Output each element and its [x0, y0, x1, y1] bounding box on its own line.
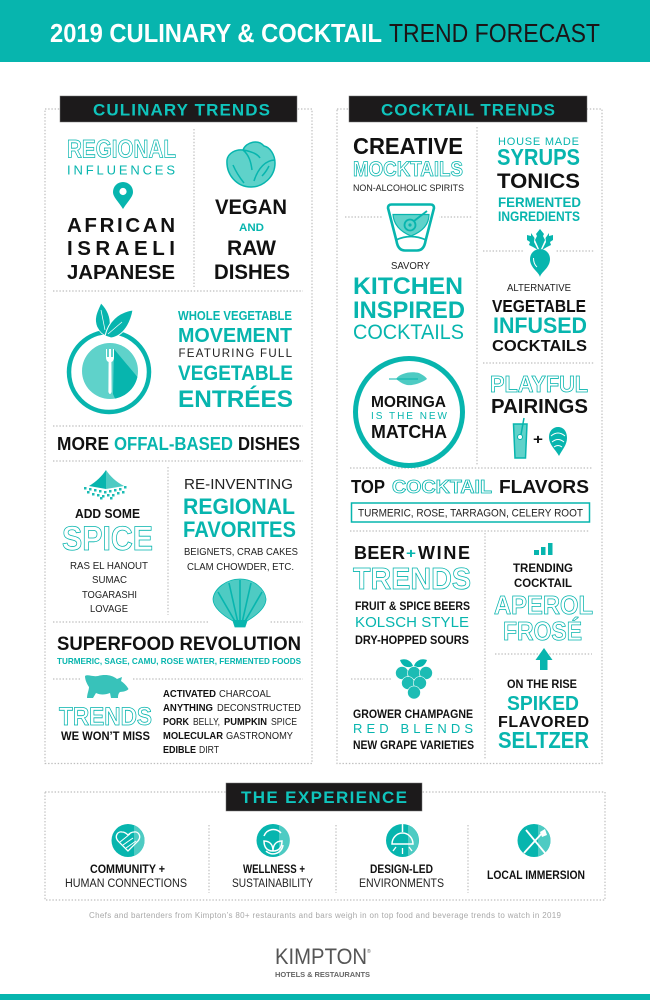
more offal-based dishes: OFFAL-BASED [114, 434, 233, 454]
playful pairings [490, 371, 588, 458]
icon: spice pile [84, 470, 126, 500]
creative mocktails: MOCKTAILS [353, 158, 463, 181]
local immersion: LOCAL IMMERSION [487, 870, 585, 882]
logo: kimpton: ® [367, 948, 371, 955]
heading: the experience: THE EXPERIENCE [241, 788, 407, 807]
trending cocktail aperol frose: TRENDING [513, 561, 573, 575]
add some spice: SPICE [62, 520, 153, 558]
whole vegetable movement: WHOLE VEGETABLE [178, 309, 292, 323]
community and human connections: HUMAN CONNECTIONS [65, 878, 187, 890]
list of trends: BELLY, [193, 716, 220, 728]
kitchen inspired cocktails: SAVORY [391, 261, 430, 272]
icon: bars [534, 543, 552, 555]
playful pairings: PLAYFUL [490, 371, 588, 397]
icon: leaf [389, 372, 427, 385]
kitchen inspired cocktails: INSPIRED [353, 297, 465, 324]
icon: leaves and arrows [256, 824, 290, 857]
add some spice: RAS EL HANOUT [70, 560, 149, 572]
top cocktail flavors: TURMERIC, ROSE, TARRAGON, CELERY ROOT [358, 508, 583, 520]
house made syrups tonics: TONICS [497, 170, 580, 193]
more offal-based dishes [57, 434, 300, 454]
plus sign: + [533, 431, 543, 447]
beer and wine trends: GROWER CHAMPAGNE [353, 707, 473, 721]
top cocktail flavors: FLAVORS [499, 477, 589, 497]
community and human connections [65, 824, 187, 890]
moringa badge [356, 358, 462, 466]
add some spice: ADD SOME [75, 506, 140, 521]
heading: culinary trends [60, 96, 297, 122]
beer and wine trends: RED BLENDS [353, 721, 473, 736]
regional influences: JAPANESE [67, 261, 175, 284]
house made syrups tonics: SYRUPS [497, 144, 580, 170]
vegan and raw dishes: RAW [227, 237, 276, 260]
top cocktail flavors: COCKTAIL [392, 477, 492, 497]
logo: kimpton: HOTELS & RESTAURANTS [275, 970, 370, 979]
icon: cabbage [227, 142, 275, 187]
superfood revolution: TURMERIC, SAGE, CAMU, ROSE WATER, FERMENTED FOODS [57, 656, 301, 666]
regional influences [67, 136, 176, 284]
playful pairings: PAIRINGS [491, 395, 588, 418]
whole vegetable movement: MOVEMENT [178, 325, 292, 347]
icon: heart handshake [112, 824, 145, 857]
trending cocktail aperol frose: COCKTAIL [514, 576, 572, 590]
beer and wine trends: WINE [418, 543, 470, 563]
creative mocktails [353, 133, 464, 194]
regional influences: AFRICAN [67, 214, 175, 237]
vegan and raw dishes: VEGAN [215, 196, 287, 219]
logo: kimpton [275, 944, 371, 979]
regional influences: INFLUENCES [67, 162, 175, 178]
spiked flavored seltzer: SELTZER [498, 727, 589, 753]
icon: pig [80, 675, 132, 698]
house made syrups tonics: INGREDIENTS [498, 208, 580, 224]
wellness and sustainability: SUSTAINABILITY [232, 878, 313, 890]
moringa badge: MORINGA [371, 394, 446, 411]
heading: the experience [226, 783, 422, 811]
list of trends: DIRT [199, 744, 219, 756]
icon: tall drink [514, 418, 527, 458]
whole vegetable movement [69, 303, 293, 413]
icon: oyster [549, 427, 567, 456]
title banner [0, 0, 650, 62]
superfood revolution: SUPERFOOD REVOLUTION [57, 634, 301, 655]
list of trends: DECONSTRUCTED [217, 702, 301, 714]
list of trends: ACTIVATED [163, 688, 216, 700]
spiked flavored seltzer [498, 677, 589, 753]
panel: cocktail trends [337, 96, 602, 764]
list of trends: GASTRONOMY [226, 730, 293, 742]
kitchen inspired cocktails: COCKTAILS [353, 321, 464, 344]
house made syrups tonics: FERMENTED [498, 194, 581, 210]
add some spice: SUMAC [92, 574, 127, 586]
title banner: 2019 CULINARY & COCKTAIL [50, 20, 382, 48]
design-led environments: DESIGN-LED [370, 864, 433, 876]
list of trends [163, 688, 301, 756]
icon: cocktail glass [383, 203, 439, 253]
house made syrups tonics: HOUSE MADE [498, 136, 579, 148]
top cocktail flavors: TOP [351, 477, 385, 497]
creative mocktails: CREATIVE [353, 133, 463, 159]
alternative vegetable infused cocktails [492, 283, 587, 355]
list of trends: ANYTHING [163, 702, 213, 714]
icon: shell [208, 579, 270, 627]
list of trends: EDIBLE [163, 744, 196, 756]
re-inventing regional favorites: FAVORITES [183, 517, 296, 542]
re-inventing regional favorites: CLAM CHOWDER, ETC. [187, 561, 294, 573]
re-inventing regional favorites: BEIGNETS, CRAB CAKES [184, 546, 298, 558]
whole vegetable movement: FEATURING FULL [178, 348, 293, 360]
alternative vegetable infused cocktails: INFUSED [493, 313, 587, 338]
panel: culinary trends [45, 96, 312, 764]
icon: pendant lamp [386, 822, 419, 857]
beer and wine trends [353, 543, 474, 752]
more offal-based dishes: MORE [57, 434, 109, 454]
re-inventing regional favorites [183, 476, 298, 627]
trending cocktail aperol frose [494, 543, 593, 646]
heading: cocktail trends [349, 96, 587, 122]
alternative vegetable infused cocktails: ALTERNATIVE [507, 283, 571, 294]
icon: crossed knife and fork [518, 824, 550, 857]
design-led environments [359, 822, 444, 890]
top cocktail flavors [351, 477, 590, 522]
trends we won't miss: TRENDS [59, 703, 152, 731]
regional influences: REGIONAL [67, 136, 176, 164]
icon: up arrow [536, 648, 552, 670]
wellness and sustainability [232, 824, 313, 890]
add some spice: LOVAGE [90, 603, 128, 615]
moringa badge: IS THE NEW [371, 411, 448, 422]
local immersion [487, 824, 585, 882]
vegan and raw dishes [214, 142, 290, 284]
beer and wine trends: KOLSCH STYLE [355, 614, 469, 631]
beer and wine trends: + [406, 545, 416, 561]
icon: map pin [113, 182, 133, 209]
spiked flavored seltzer: ON THE RISE [507, 677, 577, 691]
beer and wine trends: DRY-HOPPED SOURS [355, 633, 469, 647]
moringa badge: MATCHA [371, 422, 447, 442]
wellness and sustainability: WELLNESS + [243, 864, 305, 876]
logo: kimpton: KIMPTON [275, 944, 367, 969]
heading: cocktail trends: COCKTAIL TRENDS [381, 100, 555, 120]
whole vegetable movement: ENTRÉES [178, 385, 293, 413]
spiked flavored seltzer: FLAVORED [498, 714, 589, 731]
vegan and raw dishes: AND [239, 222, 264, 234]
whole vegetable movement: VEGETABLE [178, 362, 293, 385]
footer bar [0, 994, 650, 1000]
more offal-based dishes: DISHES [238, 434, 300, 454]
beer and wine trends: NEW GRAPE VARIETIES [353, 738, 474, 752]
panel: the experience [45, 783, 605, 900]
add some spice [62, 470, 153, 615]
spiked flavored seltzer: SPIKED [507, 693, 579, 715]
alternative vegetable infused cocktails: COCKTAILS [492, 338, 587, 355]
creative mocktails: NON-ALCOHOLIC SPIRITS [353, 183, 464, 194]
kitchen inspired cocktails [353, 261, 465, 344]
alternative vegetable infused cocktails: VEGETABLE [492, 296, 586, 316]
house made syrups tonics [497, 136, 581, 224]
list of trends: CHARCOAL [219, 688, 271, 700]
design-led environments: ENVIRONMENTS [359, 878, 444, 890]
add some spice: TOGARASHI [82, 589, 137, 601]
regional influences: ISRAELI [67, 237, 175, 260]
title banner: TREND FORECAST [389, 20, 600, 48]
beer and wine trends: FRUIT & SPICE BEERS [355, 599, 470, 613]
trends we won't miss: WE WON’T MISS [61, 729, 150, 743]
icon: grapes [392, 659, 436, 699]
icon: plate with fork and leaves [69, 303, 150, 412]
heading: culinary trends: CULINARY TRENDS [93, 100, 270, 120]
vegan and raw dishes: DISHES [214, 261, 290, 284]
superfood revolution [57, 634, 301, 666]
trending cocktail aperol frose: FROSÉ [503, 616, 582, 646]
community and human connections: COMMUNITY + [90, 864, 165, 876]
re-inventing regional favorites: REGIONAL [183, 494, 295, 519]
re-inventing regional favorites: RE-INVENTING [184, 476, 293, 493]
list of trends: PUMPKIN [224, 716, 267, 728]
trends we won't miss [59, 675, 152, 743]
caption: Chefs and bartenders from Kimpton’s 80+ restaurants and bars weigh in on top food and beverage trends to watch in 2019 [89, 911, 562, 920]
list of trends: PORK [163, 716, 189, 728]
kitchen inspired cocktails: KITCHEN [353, 273, 463, 300]
icon: beet [524, 229, 556, 277]
list of trends: MOLECULAR [163, 730, 223, 742]
list of trends: SPICE [271, 716, 297, 728]
trending cocktail aperol frose: APEROL [494, 590, 593, 620]
beer and wine trends: TRENDS [353, 561, 471, 596]
beer and wine trends: BEER [354, 543, 405, 563]
